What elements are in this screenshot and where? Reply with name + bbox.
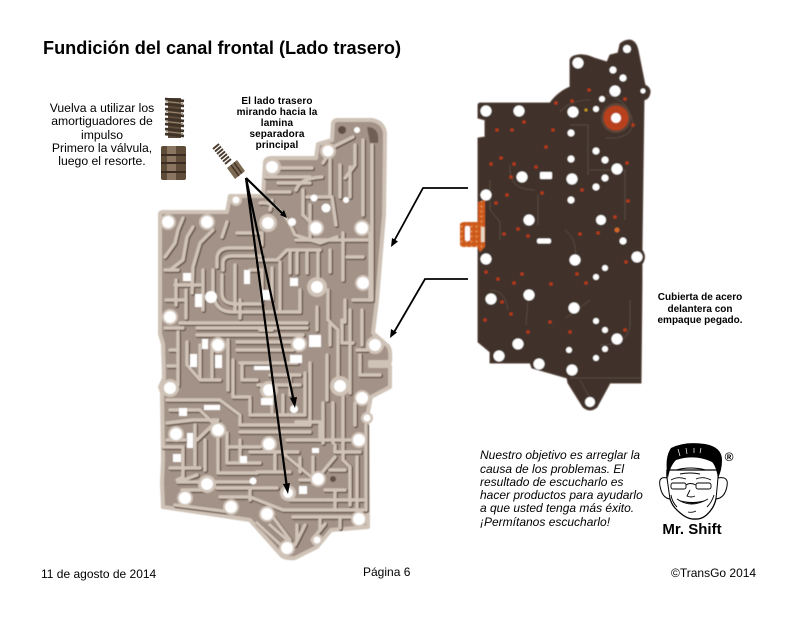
text: steel cover label: Cubierta de acero xyxy=(658,292,742,303)
orange gasket tab xyxy=(460,200,485,252)
text: steel cover label: empaque pegado. xyxy=(657,315,743,326)
footer: copyright: ©TransGo 2014 xyxy=(671,566,756,580)
text: reuse pulse dampers instruction: impulso xyxy=(81,128,123,142)
text: objective statement: Nuestro objetivo es arreglar la xyxy=(480,448,640,462)
text: objective statement: ¡Permítanos escucharlo! xyxy=(480,515,611,529)
icon: large spring xyxy=(165,98,184,138)
casting channel shadows xyxy=(164,138,381,548)
text: objective statement xyxy=(480,448,643,529)
text: reuse pulse dampers instruction: Primero la válvula, xyxy=(52,141,152,155)
text: objective statement: a que usted tenga más éxito. xyxy=(480,501,634,515)
text: back side note: mirando hacia la xyxy=(237,107,318,118)
registered mark: ® xyxy=(725,450,734,464)
arrow: upper plate-to-casting leader xyxy=(391,188,468,247)
panel: valve body casting xyxy=(160,120,390,558)
footer: date: 11 de agosto de 2014 xyxy=(41,567,157,581)
footer: page number: Página 6 xyxy=(363,565,411,579)
orange gasket ring xyxy=(601,103,631,133)
text: objective statement: hacer productos para ayudarlo xyxy=(480,488,643,502)
icon: Mr. Shift cartoon face xyxy=(660,443,727,519)
text: objective statement: causa de los problemas. El xyxy=(480,462,624,476)
text: steel cover label xyxy=(657,292,743,326)
arrow: lower plate-to-casting leader xyxy=(390,279,468,338)
plate holes xyxy=(480,45,646,407)
title: Fundición del canal frontal (Lado trasero) xyxy=(43,38,401,58)
casting bosses xyxy=(160,143,384,556)
text: reuse pulse dampers instruction xyxy=(50,101,154,168)
text: back side note: separadora xyxy=(249,129,305,140)
red gasket dots xyxy=(483,88,635,334)
casting holes xyxy=(162,127,381,554)
text: reuse pulse dampers instruction: luego el resorte. xyxy=(58,154,146,168)
cover plate impressions xyxy=(490,95,640,398)
Mr. Shift caption: Mr. Shift xyxy=(662,521,722,538)
casting ridges xyxy=(163,137,380,547)
text: back side note: lamina xyxy=(261,118,294,129)
panel: steel cover plate with gasket xyxy=(460,40,650,410)
text: back side note: principal xyxy=(256,140,298,151)
arrows: pointing to casting locations xyxy=(246,178,297,494)
text: steel cover label: delantera con xyxy=(667,304,733,315)
text: reuse pulse dampers instruction: amortiguadores de xyxy=(51,114,153,128)
text: objective statement: resultado de escucharlo es xyxy=(480,475,623,489)
text: back side note: El lado trasero xyxy=(241,96,313,107)
icon: small spring and valve xyxy=(213,144,245,179)
icon: large valve xyxy=(161,146,186,180)
text: reuse pulse dampers instruction: Vuelva a utilizar los xyxy=(50,101,154,115)
text: back side note xyxy=(237,96,318,151)
